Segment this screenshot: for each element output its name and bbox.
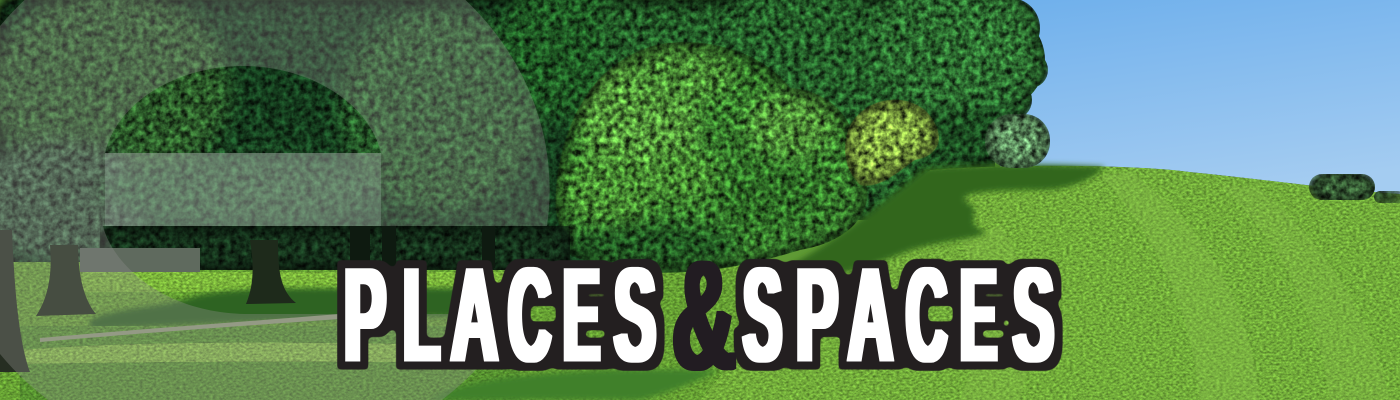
distant wall [80,248,200,272]
yellow-green bush [845,100,939,186]
hill [700,164,1400,400]
title: PLACES & SPACES: P [344,241,386,390]
mid lawn [20,326,520,400]
hill shadow [760,164,1105,281]
title: PLACES & SPACES [344,241,1054,390]
lit band [20,343,520,364]
tree shade [90,288,480,330]
title: PLACES & SPACES: P [796,241,838,390]
e crossbar [105,153,381,226]
letter e translucent overlay [0,0,550,400]
grass lawn [0,262,900,400]
title ampersand: & [672,229,736,400]
mowing stripes [1100,172,1260,400]
title: PLACES & SPACES: L [403,241,440,390]
foreground shade [430,369,720,400]
sky [1000,0,1400,210]
title: PLACES & SPACES: E [960,241,997,390]
title: PLACES & SPACES: E [563,241,600,390]
small tree on crest [985,114,1050,168]
title: PLACES & SPACES: C [508,241,551,390]
background tree mass [0,0,1048,272]
title: PLACES & SPACES: C [906,241,947,390]
title: PLACES & SPACES: A [451,241,498,390]
title: PLACES & SPACES: S [614,241,656,390]
tree trunks [0,226,495,372]
footpath [40,314,340,342]
front bush [555,42,868,273]
title: PLACES & SPACES: A [848,241,893,390]
right distant bushes [1309,174,1400,203]
title: PLACES & SPACES: S [743,241,782,390]
lit grass band [60,272,530,292]
lawn detail [20,272,720,400]
e ring [0,0,550,400]
banner scene: S [1013,241,1054,390]
dark understory [100,226,570,270]
